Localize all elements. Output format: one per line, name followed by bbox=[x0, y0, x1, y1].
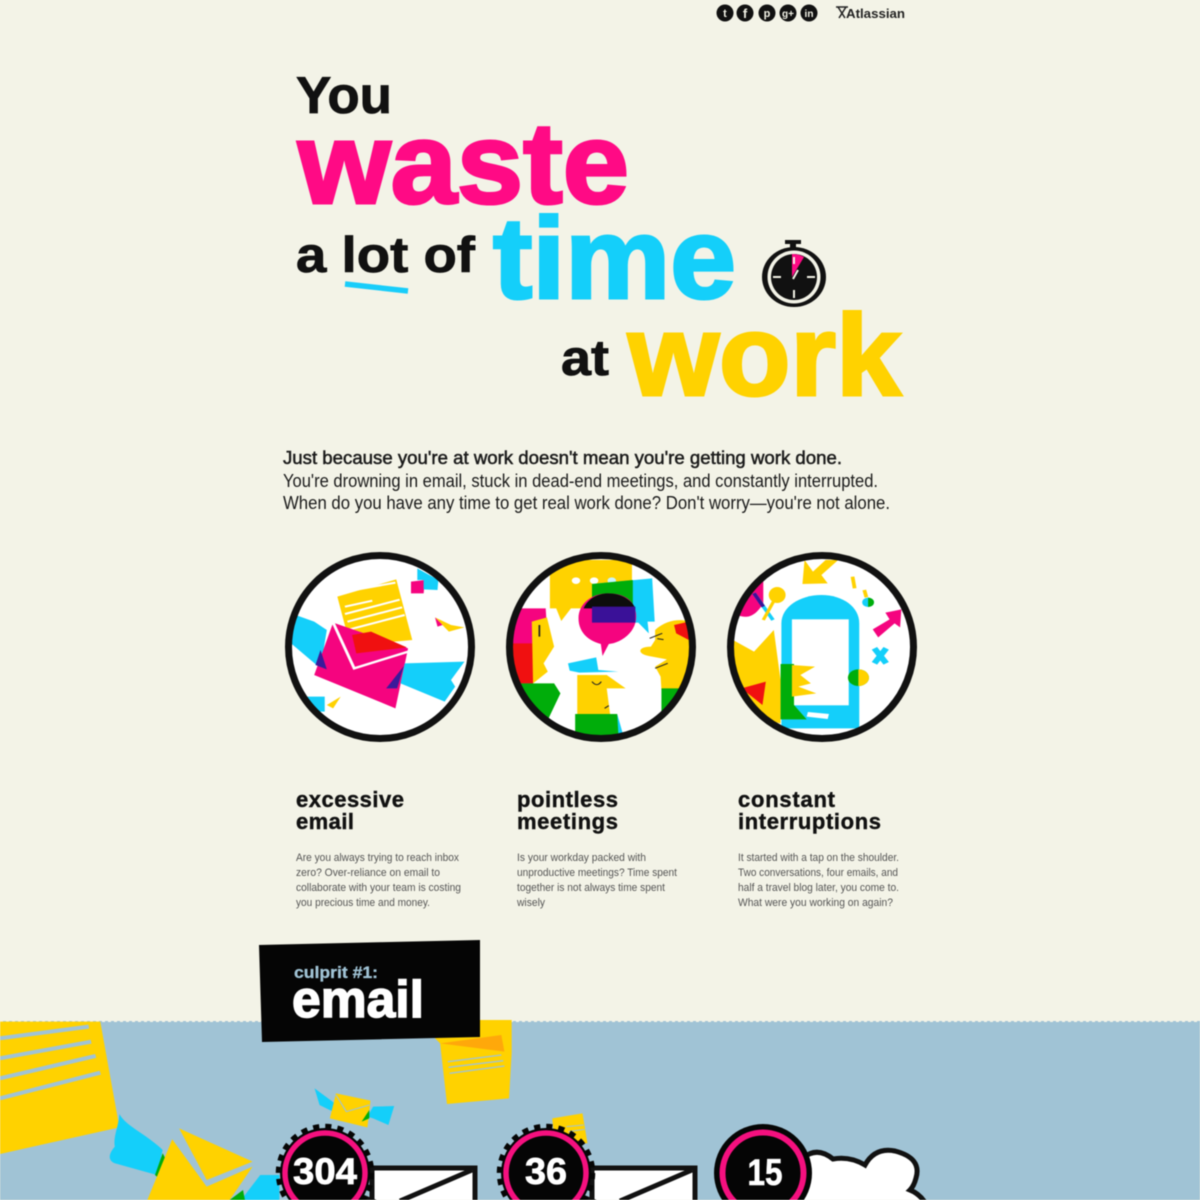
intro text bbox=[283, 448, 890, 513]
illustration: small yellow note bbox=[552, 1113, 587, 1143]
heading: constant interruptions bbox=[738, 787, 881, 834]
icon: interruptions circle bbox=[730, 556, 914, 738]
icon: envelope 36: 36 bbox=[525, 1151, 567, 1192]
icon: cloud 15: 15 bbox=[748, 1152, 782, 1193]
title: work bbox=[627, 292, 902, 420]
icon: flying email circle bbox=[288, 556, 472, 738]
heading: pointless meetings: pointless bbox=[517, 787, 618, 812]
social icons row: in bbox=[805, 9, 813, 20]
icon: cloud 15 bbox=[714, 1124, 926, 1200]
title: time bbox=[493, 195, 736, 323]
illustration: large winged envelope bbox=[110, 1114, 279, 1200]
illustration: large yellow letter bbox=[0, 1022, 119, 1154]
text: interruptions description bbox=[738, 852, 899, 909]
text: interruptions description: Two conversations, four emails, and bbox=[738, 867, 898, 879]
text: email description: you precious time and money. bbox=[296, 897, 430, 909]
text: interruptions description: What were you working on again? bbox=[738, 897, 893, 909]
heading: excessive email: excessive bbox=[296, 787, 404, 812]
text: interruptions description: half a travel blog later, you come to. bbox=[738, 882, 899, 894]
intro text: You're drowning in email, stuck in dead-end meetings, and constantly interrupted. bbox=[283, 471, 878, 491]
text: meetings description: wisely bbox=[516, 897, 545, 909]
social icons row: g+ bbox=[782, 9, 794, 20]
title: You bbox=[296, 67, 392, 125]
title bbox=[296, 67, 902, 420]
heading: pointless meetings bbox=[517, 787, 618, 834]
heading: excessive email: email bbox=[296, 809, 354, 834]
text: meetings description: together is not always time spent bbox=[517, 882, 665, 894]
text: meetings description: Is your workday packed with bbox=[517, 852, 646, 864]
text: meetings description: unproductive meetings? Time spent bbox=[517, 867, 677, 879]
heading: constant interruptions: interruptions bbox=[738, 809, 881, 834]
social icons row bbox=[716, 4, 818, 22]
heading: constant interruptions: constant bbox=[738, 787, 836, 812]
heading: excessive email bbox=[296, 787, 404, 834]
icon: stopwatch bbox=[762, 240, 826, 307]
icon: envelope 36 bbox=[499, 1126, 695, 1200]
text: interruptions description: It started with a tap on the shoulder. bbox=[738, 852, 899, 864]
intro text: When do you have any time to get real work done? Don't worry—you're not alone. bbox=[283, 493, 890, 513]
icon: envelope 304 bbox=[278, 1126, 475, 1200]
icon: meetings circle bbox=[510, 556, 693, 740]
panel: blue email section background bbox=[0, 1021, 1200, 1200]
label: culprit #1 email: email bbox=[292, 971, 424, 1029]
label: culprit #1 email bbox=[259, 940, 480, 1042]
label: culprit #1 email: culprit #1: bbox=[294, 963, 378, 982]
title: at bbox=[561, 330, 609, 386]
illustration: sticky note bbox=[417, 1020, 512, 1104]
heading: pointless meetings: meetings bbox=[517, 809, 618, 834]
social icons row: f bbox=[743, 6, 748, 21]
social icons row: p bbox=[764, 8, 771, 20]
text: meetings description bbox=[516, 852, 677, 909]
text: email description: zero? Over-reliance on email to bbox=[296, 867, 440, 879]
title: waste bbox=[297, 100, 629, 228]
icon: envelope 304: 304 bbox=[293, 1151, 357, 1192]
intro text: Just because you're at work doesn't mean you're getting work done. bbox=[283, 448, 842, 468]
illustration: small winged envelope bbox=[315, 1088, 394, 1127]
text: email description: collaborate with your team is costing bbox=[296, 882, 461, 894]
title: a lot of bbox=[296, 227, 475, 283]
Atlassian logo: Atlassian bbox=[846, 6, 905, 21]
text: email description bbox=[296, 852, 461, 909]
text: email description: Are you always trying to reach inbox bbox=[296, 852, 459, 864]
social icons row: t bbox=[723, 8, 727, 20]
